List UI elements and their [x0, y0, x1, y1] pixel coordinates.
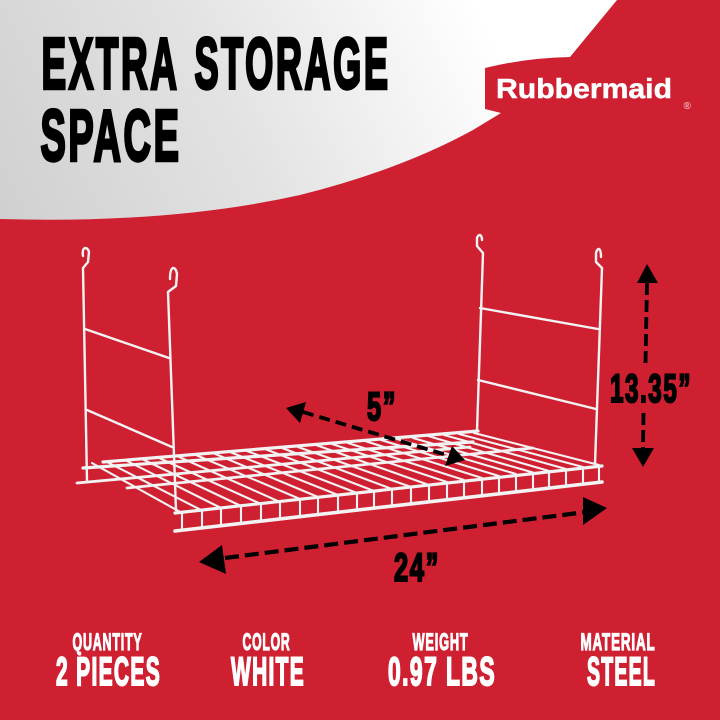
title: SPACE — [40, 96, 182, 176]
grey header swoosh — [0, 0, 617, 220]
Rubbermaid logo — [496, 73, 692, 112]
spec: color — [231, 629, 305, 694]
title: STORAGE — [194, 24, 390, 104]
spec: quantity — [56, 629, 161, 694]
shelf rods — [77, 431, 602, 531]
spec: material — [580, 629, 656, 694]
height arrow 13.35 inches — [632, 264, 658, 467]
width label: 24” — [394, 546, 440, 590]
spec: quantity: QUANTITY — [72, 629, 142, 656]
width arrow 24 inches — [199, 497, 607, 574]
spec: weight: WEIGHT — [412, 629, 468, 656]
shelf slats — [92, 433, 599, 530]
wire shelf — [77, 235, 602, 531]
depth label: 5” — [367, 385, 397, 429]
depth arrow 5 inches — [286, 402, 465, 466]
Rubbermaid logo: Rubbermaid — [496, 73, 672, 104]
spec: weight — [388, 629, 496, 694]
spec: weight: 0.97 LBS — [388, 650, 496, 694]
Rubbermaid logo: ® — [684, 101, 692, 112]
spec: color: COLOR — [242, 629, 290, 656]
spec: quantity: 2 PIECES — [56, 650, 161, 694]
title — [40, 24, 390, 176]
right bracket — [477, 235, 602, 464]
left bracket — [83, 248, 177, 510]
title: EXTRA — [42, 24, 180, 104]
spec: material: MATERIAL — [580, 629, 656, 656]
spec: color: WHITE — [231, 650, 305, 694]
